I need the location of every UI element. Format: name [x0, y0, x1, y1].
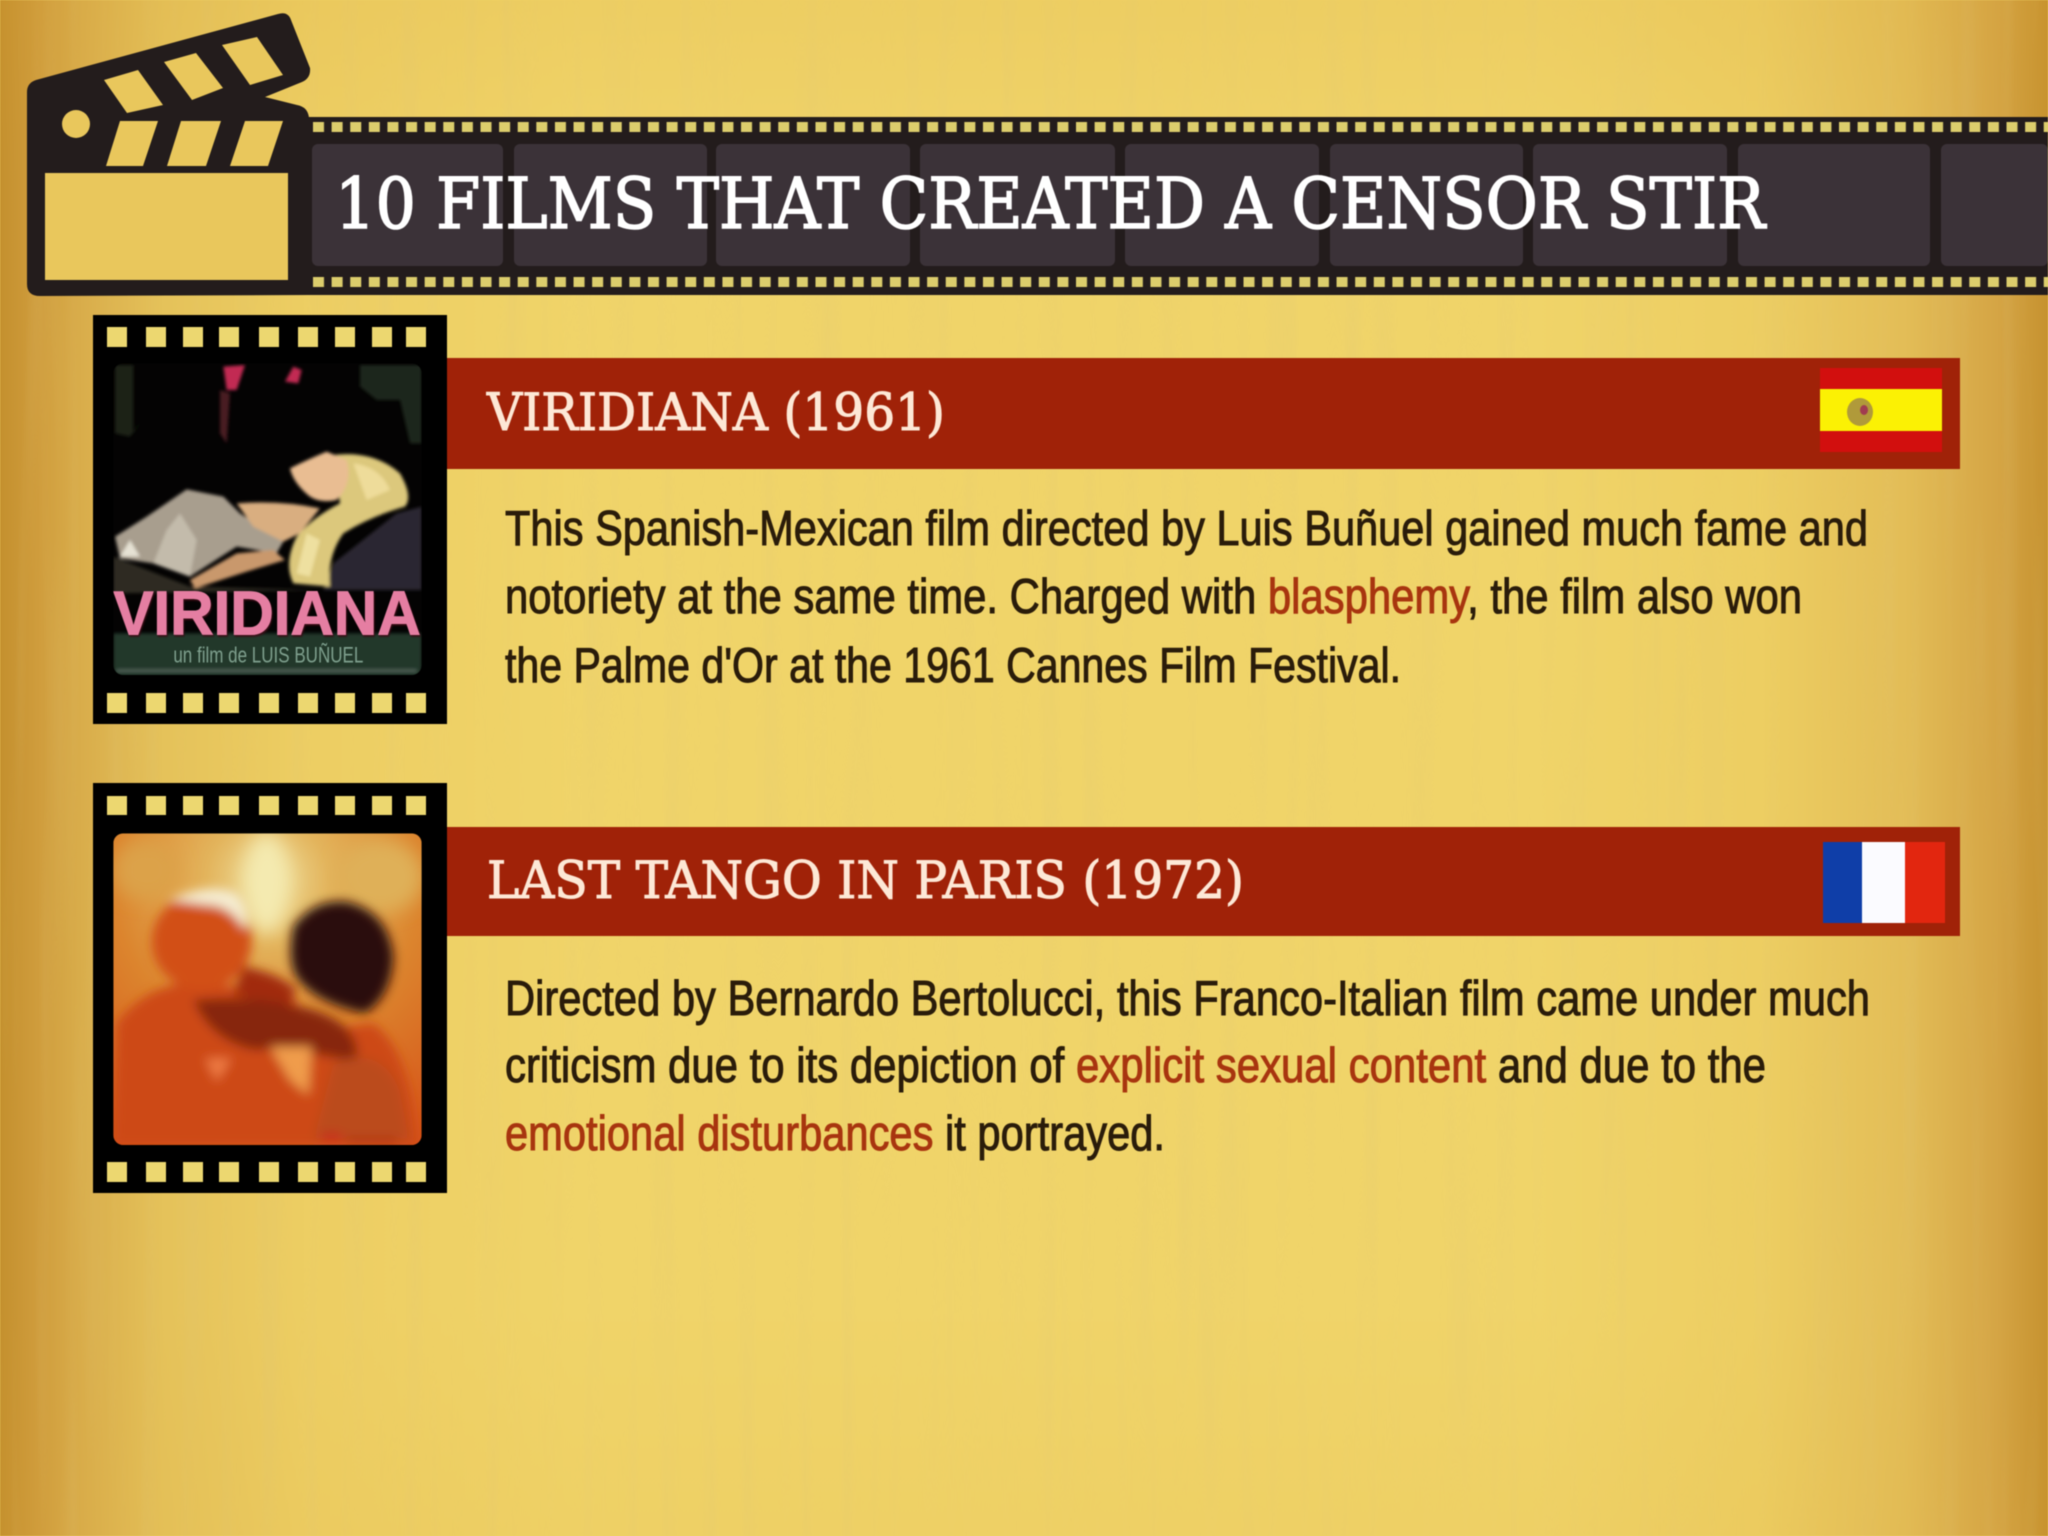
description: Last Tango in Paris: criticism due to its depiction of explicit sexual content and due to the [505, 1039, 1766, 1093]
icon: film clapperboard [27, 13, 310, 296]
poster: Last Tango in Paris [113, 833, 423, 1147]
icon: flag of Spain [1820, 368, 1942, 452]
description: Viridiana: notoriety at the same time. Charged with blasphemy, the film also won [505, 570, 1802, 624]
heading: Viridiana: VIRIDIANA (1961) [486, 384, 945, 443]
heading: Last Tango in Paris: LAST TANGO IN PARIS (1972) [487, 852, 1244, 911]
poster credit: un film de LUIS BUÑUEL [173, 643, 363, 668]
description: Viridiana [505, 502, 1868, 693]
film frame with poster [93, 315, 447, 724]
description: Last Tango in Paris [505, 972, 1870, 1161]
film title bar [447, 827, 1960, 936]
sprocket holes [107, 327, 426, 713]
poster: Viridiana [113, 363, 422, 677]
poster lettering: VIRIDIANA [113, 580, 421, 649]
sprocket holes [107, 796, 426, 1182]
film title bar [447, 358, 1960, 469]
panel: Last Tango in Paris [93, 783, 1960, 1193]
description: Viridiana: the Palme d'Or at the 1961 Cannes Film Festival. [505, 639, 1401, 693]
panel: Viridiana [93, 315, 1960, 724]
header film strip [290, 117, 2048, 295]
film frame with poster [93, 783, 447, 1193]
title: 10 FILMS THAT CREATED A CENSOR STIR [335, 163, 1767, 245]
icon: flag of France [1823, 842, 1945, 923]
description: Last Tango in Paris: emotional disturbances it portrayed. [505, 1107, 1165, 1161]
